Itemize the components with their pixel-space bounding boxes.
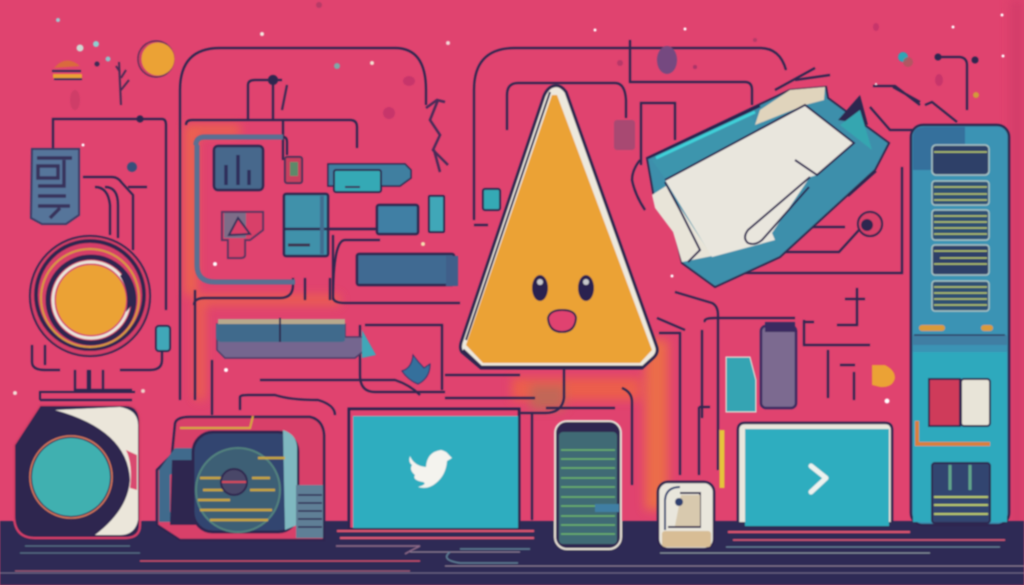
icon: sun [138, 41, 174, 77]
chip: maze panel left [31, 149, 79, 224]
teal device box [726, 357, 756, 412]
icon: small burger [52, 60, 82, 79]
eye: right [578, 275, 594, 301]
circuit lines: center-left panel [180, 48, 520, 415]
squiggle connector [426, 100, 448, 172]
purple device box [761, 322, 796, 408]
icon: small dial [858, 212, 882, 236]
circuit lines: center-right [474, 40, 967, 475]
teal square at triangle edge [483, 189, 500, 210]
floor band [0, 521, 1024, 585]
chip: blue square module [377, 205, 418, 234]
chip: triangle sign [222, 212, 263, 258]
chip: wide dark-blue module [357, 254, 458, 286]
chip: teal horizontal module [328, 164, 411, 192]
server bottom panel [932, 463, 990, 523]
small teal bird [402, 355, 430, 384]
server indicator lines [934, 152, 987, 305]
server slot rows [932, 145, 989, 311]
triangle character [460, 86, 657, 368]
server red and white cards [929, 379, 990, 426]
circuit lines: left [32, 116, 166, 400]
camera: left [14, 370, 140, 538]
folder dark corner [838, 95, 868, 125]
folder teal corner [840, 110, 872, 150]
teal connector tab [156, 326, 170, 351]
orange blob [872, 365, 895, 387]
chip: small green sensor [285, 157, 302, 183]
speckles [13, 2, 1004, 404]
orange ring [30, 236, 150, 356]
circuit panel frame [196, 137, 295, 282]
icon: chevron [811, 466, 826, 492]
laptop: right [660, 423, 1005, 553]
folder document [647, 87, 889, 287]
server lower slots [922, 325, 990, 331]
chip: horizontal bar module [216, 318, 376, 358]
chip: bar chart module [214, 146, 263, 190]
phone device [555, 421, 621, 549]
chip: large blue module [284, 194, 377, 256]
icon: twitter bird [409, 450, 452, 488]
laptop base [336, 531, 534, 563]
mouth [548, 310, 576, 332]
laptop base [660, 532, 1005, 553]
laptop: left [336, 409, 534, 563]
bracket near triangle: yellow bar [720, 430, 724, 488]
icon: twig [116, 62, 129, 105]
connector bars under triangle [445, 368, 632, 520]
lock device [658, 482, 714, 549]
circuit dots [614, 46, 979, 150]
server orange bracket [917, 421, 990, 444]
eye: left [532, 275, 548, 301]
camera: center [157, 416, 324, 540]
server tower [911, 125, 1009, 525]
chip: thin teal module [429, 196, 444, 232]
